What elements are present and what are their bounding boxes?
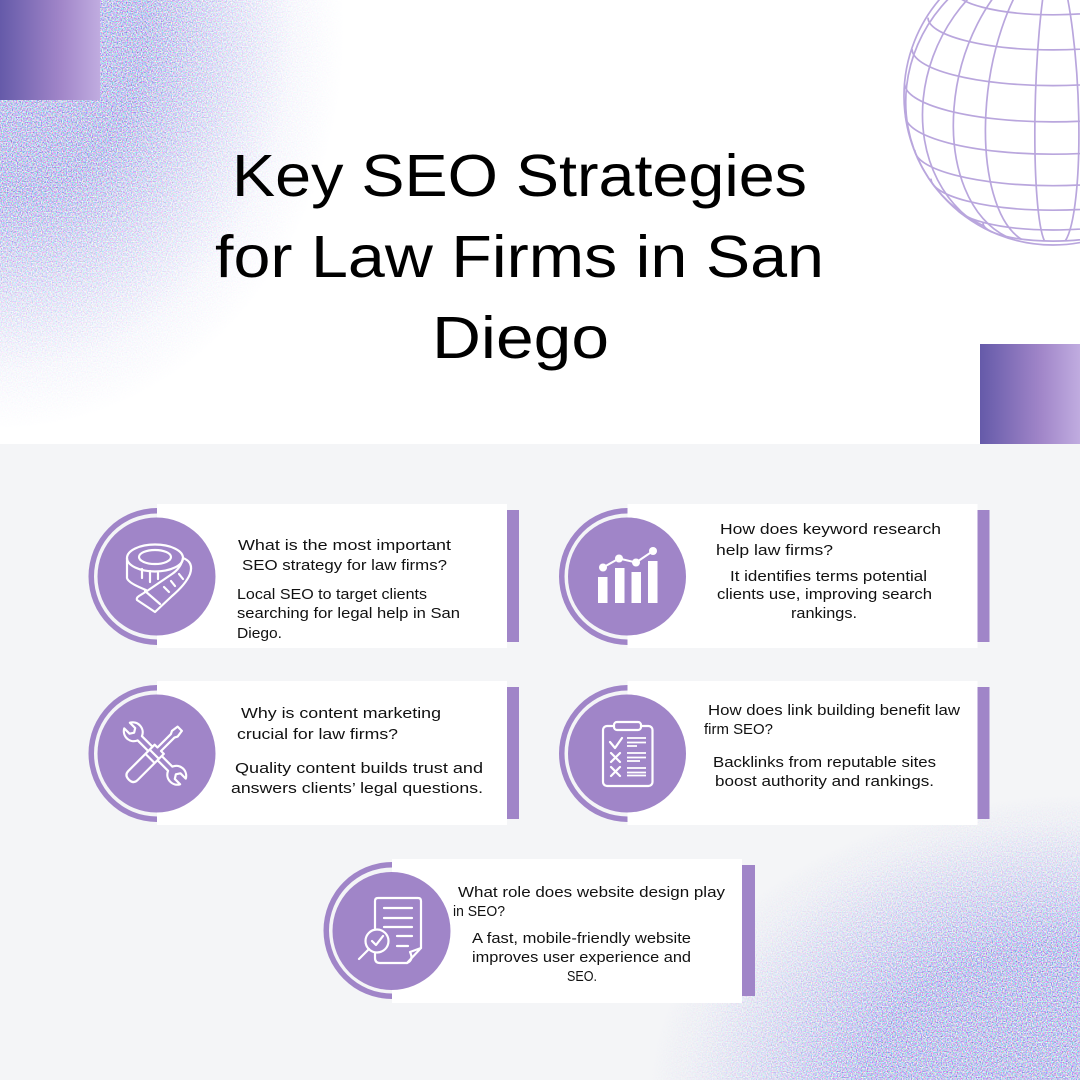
decorative square: right: [980, 344, 1080, 444]
icon: measuring tape: [127, 544, 191, 612]
question and answer text: SEO.: [567, 969, 597, 985]
question and answer text: Quality content builds trust and: [235, 760, 483, 777]
decorative square: top left: [0, 0, 100, 100]
question and answer text: rankings.: [791, 606, 857, 622]
question and answer text: How does link building benefit law: [708, 702, 960, 719]
question and answer text: What is the most important: [238, 537, 452, 554]
title: [215, 143, 824, 371]
question and answer text: crucial for law firms?: [237, 726, 398, 743]
question and answer text: It identifies terms potential: [730, 569, 927, 585]
title: Diego: [432, 305, 609, 371]
question and answer text: help law firms?: [716, 542, 833, 559]
panel: link building: [559, 681, 990, 825]
question and answer text: SEO strategy for law firms?: [242, 557, 447, 574]
title: Key SEO Strategies: [232, 143, 807, 209]
question and answer text: Local SEO to target clients: [237, 587, 427, 603]
question and answer text: searching for legal help in San: [237, 606, 460, 622]
question and answer text: [704, 702, 960, 790]
panel: website design: [324, 859, 755, 1003]
question and answer text: clients use, improving search: [717, 587, 932, 603]
question and answer text: in SEO?: [453, 903, 505, 920]
icon: wrench and screwdriver: [121, 719, 189, 788]
question and answer text: firm SEO?: [704, 721, 773, 738]
icon: bar chart with trend line: [598, 547, 658, 603]
question and answer text: answers clients’ legal questions.: [231, 780, 483, 797]
question and answer text: What role does website design play: [458, 884, 726, 901]
panel: most important SEO strategy: [88, 504, 519, 648]
question and answer text: [237, 537, 460, 642]
question and answer text: Backlinks from reputable sites: [713, 755, 936, 771]
question and answer text: [716, 521, 941, 622]
question and answer text: Why is content marketing: [241, 705, 441, 722]
question and answer text: [453, 884, 726, 985]
question and answer text: Diego.: [237, 626, 282, 642]
question and answer text: boost authority and rankings.: [715, 774, 934, 790]
question and answer text: How does keyword research: [720, 521, 941, 538]
question and answer text: A fast, mobile-friendly website: [472, 931, 691, 947]
icon: checklist clipboard: [603, 722, 652, 786]
panel: keyword research: [559, 504, 990, 648]
icon: wireframe globe: [904, 0, 1080, 245]
title: for Law Firms in San: [215, 224, 824, 290]
icon: document with magnifier: [359, 898, 421, 963]
question and answer text: [231, 705, 483, 797]
question and answer text: improves user experience and: [472, 950, 691, 966]
panel: content marketing: [88, 681, 519, 825]
